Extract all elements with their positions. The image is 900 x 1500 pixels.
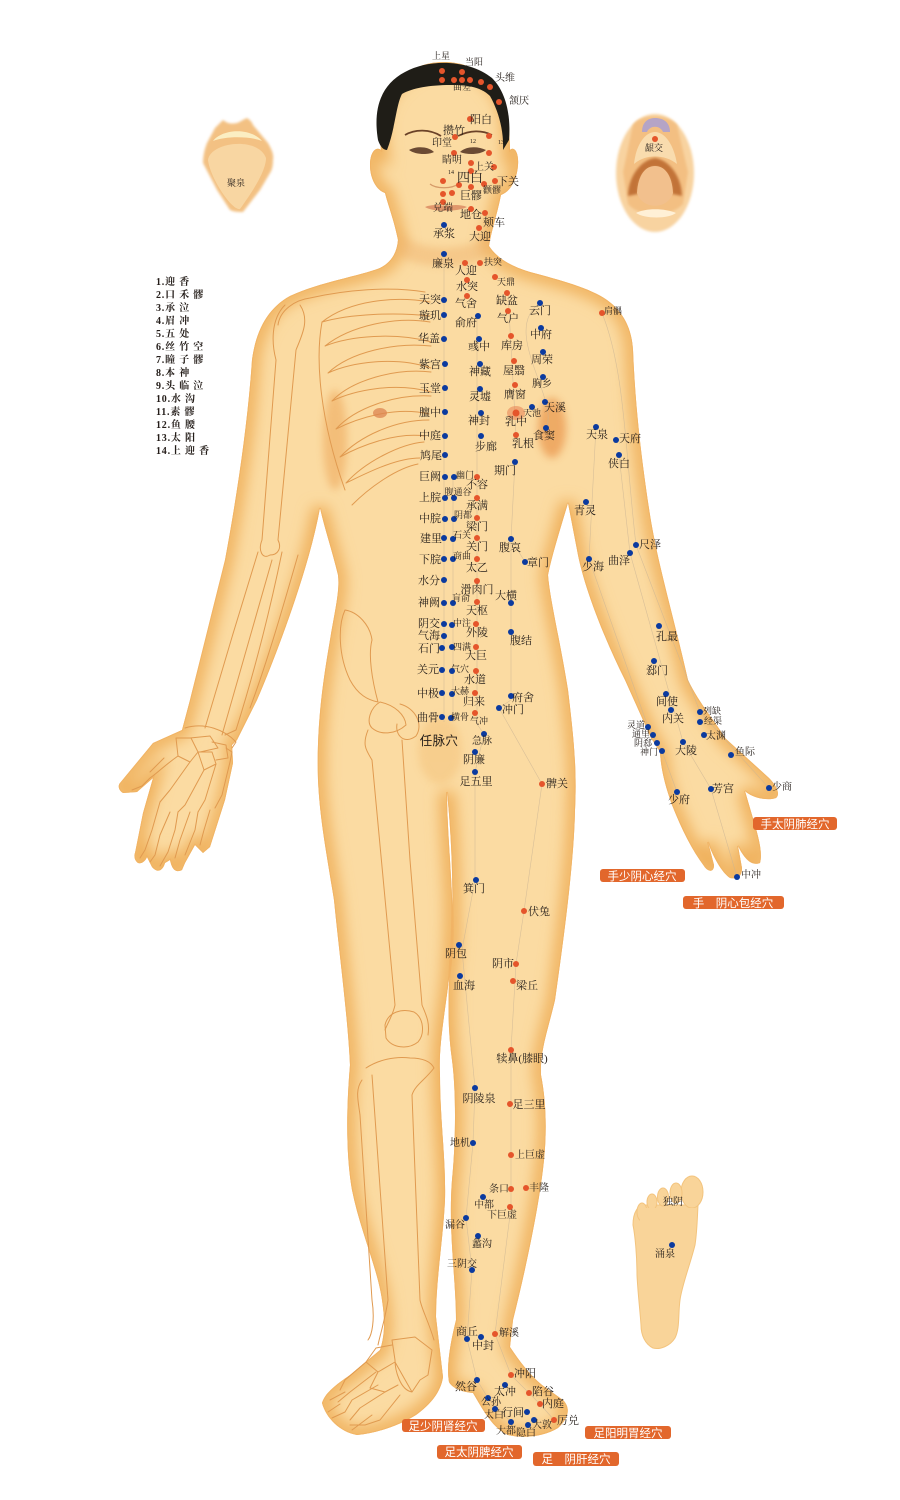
spleen and lung chest points: 冲门 xyxy=(502,702,524,716)
ren meridian points: 廉泉 xyxy=(432,256,454,270)
kidney meridian points: 商曲 xyxy=(453,550,471,561)
legend: numbered points: 5.五 处 xyxy=(156,327,190,340)
right arm and hand points: 间使 xyxy=(656,694,678,708)
foot points: 行间 xyxy=(502,1405,524,1419)
leg points: 血海 xyxy=(453,978,475,992)
face: features xyxy=(405,131,492,211)
badge: stomach meridian: 足阳明胃经穴 xyxy=(594,1426,663,1440)
foot points: 太白 xyxy=(484,1408,504,1421)
leg points: 蠡沟 xyxy=(472,1237,492,1250)
skeleton: arm xyxy=(132,289,425,866)
legend: numbered points: 6.丝 竹 空 xyxy=(156,340,204,353)
ren meridian points: 天突 xyxy=(419,293,441,306)
foot points xyxy=(455,1324,579,1439)
head acupoints: 颊车 xyxy=(483,215,505,229)
right arm and hand points: 经渠 xyxy=(704,715,722,726)
foot points: 解溪 xyxy=(499,1326,519,1339)
foot points: 然谷 xyxy=(455,1380,477,1393)
leg points: 上巨虚 xyxy=(515,1148,545,1161)
spleen and lung chest points: 足五里 xyxy=(460,775,492,788)
right arm and hand points: 大陵 xyxy=(675,743,697,757)
kidney meridian points: 神封 xyxy=(468,413,490,427)
head acupoints: 地仓 xyxy=(460,207,482,221)
right arm and hand points: 侠白 xyxy=(608,456,630,470)
ren meridian points: 石门 xyxy=(418,641,440,655)
spleen and lung chest points: 大横 xyxy=(495,588,517,602)
stomach meridian points: 缺盆 xyxy=(496,293,518,307)
right arm and hand points: 天泉 xyxy=(586,428,608,441)
ren meridian points: 阴交 xyxy=(418,616,440,630)
ren meridian points: 玉堂 xyxy=(419,381,441,395)
legend: numbered points: 1.迎 香 xyxy=(156,275,190,288)
stomach meridian points: 膺窗 xyxy=(504,387,526,401)
right arm and hand points: 阴郄 xyxy=(634,737,652,748)
ren meridian points: 中极 xyxy=(417,686,439,700)
stomach meridian points: 髀关 xyxy=(546,777,568,790)
kidney meridian points: 幽门 xyxy=(456,469,474,480)
spleen and lung chest points xyxy=(460,300,566,788)
right arm and hand points: 通里 xyxy=(632,729,650,739)
stomach meridian points: 屋翳 xyxy=(503,364,525,377)
spleen and lung chest points: 天溪 xyxy=(544,400,566,414)
foot points: 中封 xyxy=(472,1338,494,1352)
legend: numbered points: 12.鱼 腰 xyxy=(156,418,196,431)
head acupoints: 曲差 xyxy=(453,81,471,92)
head acupoints: 四白 xyxy=(457,170,483,185)
stomach meridian points: 乳中 xyxy=(505,414,527,428)
ren meridian points xyxy=(417,256,454,724)
leg points xyxy=(445,877,550,1273)
right arm and hand points: 芳宫 xyxy=(712,781,734,795)
head acupoints: 13 xyxy=(498,140,504,146)
foot points: 内庭 xyxy=(542,1396,564,1410)
spleen and lung chest points: 中府 xyxy=(530,327,552,341)
ren meridian points: 璇玑 xyxy=(419,309,441,322)
stomach meridian points: 乳根 xyxy=(512,436,534,450)
stomach meridian points: 外陵 xyxy=(466,625,488,639)
right arm and hand points xyxy=(574,424,792,881)
skeleton: foot xyxy=(328,1337,432,1430)
stomach meridian points: 气户 xyxy=(497,311,519,325)
badge: lung meridian: 手太阴肺经穴 xyxy=(760,817,830,831)
spleen and lung chest points: 云门 xyxy=(529,303,551,317)
kidney meridian points: 阴都 xyxy=(454,509,472,520)
ren meridian points: 上脘 xyxy=(419,490,441,504)
spleen and lung chest points: 周荣 xyxy=(531,352,553,366)
meridian lines xyxy=(444,254,769,1422)
head acupoints: 巨髎 xyxy=(460,189,482,202)
head acupoints: 头维 xyxy=(495,71,515,84)
leg points: 犊鼻(膝眼) xyxy=(496,1051,548,1065)
leg points: 足三里 xyxy=(512,1098,546,1111)
leg points: 下巨虚 xyxy=(487,1208,517,1221)
legend: numbered points: 8.本 神 xyxy=(156,366,190,379)
leg points: 漏谷 xyxy=(445,1219,465,1231)
stomach meridian points: 气舍 xyxy=(455,296,477,310)
head acupoints: 14 xyxy=(448,170,454,176)
kidney meridian points: 腹通谷 xyxy=(444,486,472,497)
kidney meridian points xyxy=(444,313,497,722)
leg points: 条口 xyxy=(489,1182,509,1195)
ren meridian points: 中庭 xyxy=(419,428,441,442)
head acupoints: 兑端 xyxy=(433,201,453,214)
ren meridian points: 中脘 xyxy=(419,511,441,525)
head acupoints: 颔厌 xyxy=(509,94,529,107)
spleen and lung chest points: 天池 xyxy=(523,407,541,418)
kidney meridian points: 四满 xyxy=(453,641,471,652)
right arm and hand points: 郄门 xyxy=(646,663,668,677)
right arm and hand points: 鱼际 xyxy=(735,745,756,758)
head acupoints: 承浆 xyxy=(433,226,455,240)
right arm and hand points: 中冲 xyxy=(741,868,761,881)
legend: numbered points: 7.瞳 子 髎 xyxy=(156,354,204,366)
ren meridian points: 关元 xyxy=(417,663,439,676)
foot points: 冲阳 xyxy=(514,1366,536,1380)
spleen and lung chest points: 府舍 xyxy=(512,690,534,704)
badge: liver meridian xyxy=(533,1452,619,1466)
legend: numbered points: 13.太 阳 xyxy=(156,431,196,444)
ren meridian points: 下脘 xyxy=(419,553,441,566)
inset: tongue: 聚泉 xyxy=(227,177,245,188)
legend: numbered points xyxy=(156,275,210,457)
badge: spleen meridian xyxy=(437,1445,522,1459)
stomach meridian points: 扶突 xyxy=(484,256,502,267)
head acupoints: 当阳 xyxy=(465,56,483,67)
leg points: 中都 xyxy=(474,1198,494,1211)
stomach meridian points: 水突 xyxy=(456,279,478,293)
head acupoints: 攒竹 xyxy=(443,123,465,137)
foot points: 大都 xyxy=(496,1424,516,1437)
badge: liver meridian: 足 阴肝经穴 xyxy=(542,1452,611,1466)
foot points: 公孙 xyxy=(481,1395,502,1408)
ren meridian points: 鸠尾 xyxy=(420,448,442,462)
heading: ren meridian points: 任脉穴 xyxy=(420,733,458,748)
inset: foot sole xyxy=(633,1176,703,1349)
right arm and hand points: 列缺 xyxy=(703,705,721,716)
head acupoints: 阳白 xyxy=(470,113,492,126)
head acupoints: 12 xyxy=(470,139,476,145)
skeleton: pelvis and leg xyxy=(340,610,434,1345)
foot points: 陷谷 xyxy=(532,1385,554,1398)
stomach meridian points: 承满 xyxy=(466,498,488,512)
stomach meridian points: 天鼎 xyxy=(497,277,515,287)
legend: numbered points: 9.头 临 泣 xyxy=(156,379,204,392)
ren meridian points: 神阙 xyxy=(418,595,440,609)
badge: kidney meridian: 足少阴肾经穴 xyxy=(408,1419,478,1433)
right arm and hand points: 青灵 xyxy=(574,503,596,517)
right arm and hand points: 太渊 xyxy=(706,729,726,742)
badge: spleen meridian: 足太阴脾经穴 xyxy=(444,1445,514,1459)
stomach meridian points: 气冲 xyxy=(470,715,488,726)
badge: heart meridian: 手少阴心经穴 xyxy=(608,869,677,883)
legend: numbered points: 11.素 髎 xyxy=(156,405,195,418)
legend: numbered points: 14.上 迎 香 xyxy=(156,444,210,457)
inset: open mouth xyxy=(616,114,694,232)
kidney meridian points: 肓俞 xyxy=(452,592,470,603)
badge: pericardium meridian: 手 阴心包经穴 xyxy=(693,896,774,910)
leg points: 地机 xyxy=(450,1136,470,1149)
right arm and hand points: 少府 xyxy=(668,792,690,806)
kidney meridian points: 中注 xyxy=(453,617,471,628)
spleen and lung chest points: 腹结 xyxy=(510,633,532,647)
head acupoints: 上关 xyxy=(474,160,494,173)
right arm and hand points: 神门 xyxy=(640,746,658,757)
foot points: 大敦 xyxy=(532,1418,552,1431)
legend: numbered points: 4.眉 冲 xyxy=(156,314,190,327)
inset: foot sole: 独阴 xyxy=(663,1195,683,1208)
right arm and hand points: 孔最 xyxy=(656,629,678,643)
stomach meridian points: 天枢 xyxy=(466,603,488,617)
ren meridian points: 曲骨 xyxy=(417,710,439,724)
inset: open mouth: 龈交 xyxy=(645,142,663,153)
foot points: 太冲 xyxy=(494,1384,516,1398)
right arm and hand points: 天府 xyxy=(619,431,641,445)
head acupoints: 印堂 xyxy=(432,136,452,149)
face: hair xyxy=(376,63,509,150)
kidney meridian points: 大赫 xyxy=(451,685,470,696)
legend: numbered points: 2.口 禾 髎 xyxy=(156,288,204,301)
stomach meridian points: 归来 xyxy=(463,694,485,708)
spleen and lung chest points: 阴廉 xyxy=(463,752,485,766)
head acupoints: 颧髎 xyxy=(483,184,501,195)
badge: pericardium meridian xyxy=(683,896,784,910)
stomach meridian points xyxy=(455,256,622,790)
head acupoints: 大迎 xyxy=(469,229,491,243)
stomach meridian points: 大巨 xyxy=(465,648,487,662)
kidney meridian points: 步廊 xyxy=(475,439,497,453)
stomach meridian points: 库房 xyxy=(501,338,523,352)
right arm and hand points: 少商 xyxy=(772,780,792,793)
nipple point shading xyxy=(507,406,525,420)
head acupoints xyxy=(432,50,529,257)
ren meridian points: 膻中 xyxy=(419,405,441,419)
ren meridian points: 华盖 xyxy=(418,331,440,345)
kidney meridian points: 气穴 xyxy=(451,663,469,674)
badge: stomach meridian xyxy=(585,1426,671,1440)
stomach meridian points: 人迎 xyxy=(455,263,477,277)
skeleton: ribs xyxy=(319,299,431,505)
spleen and lung chest points: 食窦 xyxy=(533,429,555,442)
body figure xyxy=(119,62,778,1437)
foot points: 商丘 xyxy=(456,1324,478,1338)
foot points: 厉兑 xyxy=(557,1413,579,1427)
ren meridian points: 紫宫 xyxy=(419,357,441,371)
head acupoints: 下关 xyxy=(497,175,519,188)
inset: foot sole: 涌泉 xyxy=(655,1247,675,1260)
stomach meridian points: 太乙 xyxy=(466,560,488,574)
leg points: 丰隆 xyxy=(529,1181,549,1194)
leg points: 阴陵泉 xyxy=(462,1091,496,1105)
stomach meridian points: 滑肉门 xyxy=(460,582,494,596)
legend: numbered points: 3.承 泣 xyxy=(156,301,190,314)
stomach meridian points: 水道 xyxy=(464,672,486,686)
leg points: 伏兔 xyxy=(528,904,550,918)
nipple xyxy=(373,408,387,418)
right arm and hand points: 灵道 xyxy=(627,719,645,730)
kidney meridian points: 神藏 xyxy=(469,364,491,378)
head acupoints: 睛明 xyxy=(442,153,462,166)
spleen and lung chest points: 章门 xyxy=(527,555,549,569)
kidney meridian points: 石关 xyxy=(453,529,471,540)
spleen and lung chest points: 腹哀 xyxy=(499,540,521,554)
kidney meridian points: 横骨 xyxy=(451,711,469,722)
kidney meridian points: 俞府 xyxy=(455,315,477,329)
ren meridian points: 建里 xyxy=(420,531,442,545)
leg points: 阴市 xyxy=(492,957,514,970)
stomach meridian points: 肩髃 xyxy=(604,305,622,316)
ren meridian points: 巨阙 xyxy=(419,469,441,483)
inset: tongue xyxy=(203,118,273,212)
badge: heart meridian xyxy=(600,869,685,883)
stomach meridian points: 梁门 xyxy=(466,519,488,533)
right arm and hand points: 曲泽 xyxy=(608,553,630,567)
spleen and lung chest points: 期门 xyxy=(494,463,516,477)
kidney meridian points: 灵墟 xyxy=(469,389,491,403)
leg points: 阴包 xyxy=(445,946,467,960)
right arm and hand points: 尺泽 xyxy=(639,538,661,551)
leg points: 箕门 xyxy=(463,881,485,895)
kidney meridian points: 彧中 xyxy=(468,339,490,353)
leg points: 梁丘 xyxy=(516,978,538,992)
stomach meridian points: 关门 xyxy=(466,539,488,553)
ren meridian points: 水分 xyxy=(418,573,440,587)
stomach meridian points: 不容 xyxy=(466,477,488,491)
foot points: 隐白 xyxy=(516,1426,536,1439)
right arm and hand points: 少海 xyxy=(582,559,604,573)
spleen and lung chest points: 急脉 xyxy=(472,734,492,747)
right arm and hand points: 内关 xyxy=(662,711,684,725)
spleen and lung chest points: 胸乡 xyxy=(532,377,552,390)
head acupoints: 上星 xyxy=(432,50,450,61)
leg points: 三阴交 xyxy=(447,1257,477,1270)
legend: numbered points: 10.水 沟 xyxy=(156,392,196,405)
ren meridian points: 气海 xyxy=(418,628,440,642)
